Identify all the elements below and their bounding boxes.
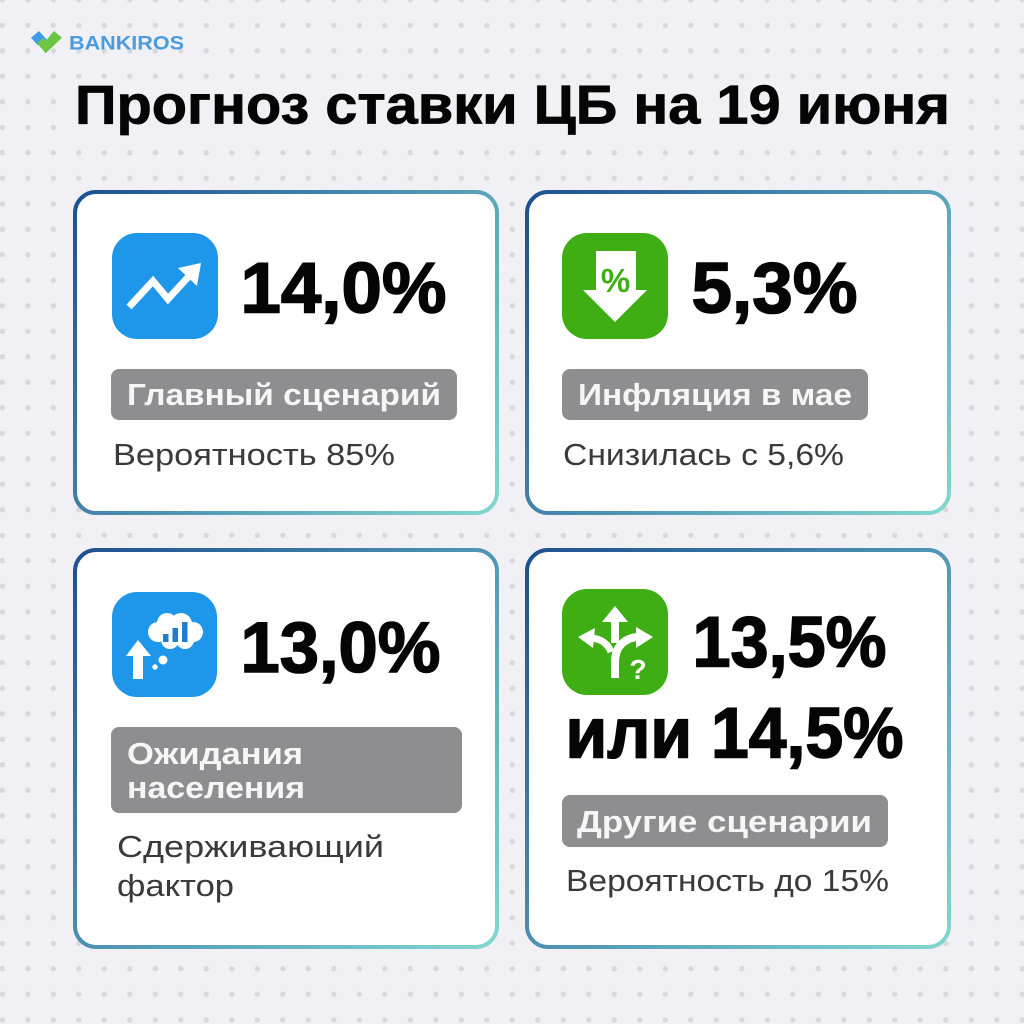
panel: main scenario <box>75 192 497 513</box>
label: household expectations: Ожидания <box>127 736 303 771</box>
label: other scenarios <box>562 795 888 847</box>
text: restraining factor <box>117 829 384 903</box>
icon: rising trend arrow <box>112 233 218 339</box>
panel: other scenarios <box>527 550 949 947</box>
panel: inflation in May <box>527 192 949 513</box>
text: restraining factor: Сдерживающий <box>117 829 384 864</box>
value: or 14,5%: или 14,5% <box>566 694 904 774</box>
label: other scenarios: Другие сценарии <box>577 804 872 839</box>
logo: Bankiros <box>31 31 184 54</box>
value: 14,0%: 14,0% <box>240 248 446 328</box>
icon: branching arrows with question mark: ? <box>629 654 647 685</box>
label: main scenario: Главный сценарий <box>127 377 441 412</box>
value: 13,5%: 13,5% <box>692 602 886 682</box>
icon: logo check mark <box>31 31 62 53</box>
panel: household expectations <box>75 550 497 947</box>
label: main scenario <box>111 369 457 420</box>
icon: branching arrows with question mark <box>562 589 668 695</box>
value: 13,0%: 13,0% <box>240 608 440 688</box>
icon: down arrow with percent <box>562 233 668 339</box>
text: fell from 5,6%: Снизилась с 5,6% <box>563 437 844 472</box>
text: restraining factor: фактор <box>117 868 234 903</box>
title: Прогноз ставки ЦБ на 19 июня <box>75 74 950 136</box>
value: 5,3%: 5,3% <box>692 248 858 328</box>
text: probability up to 15%: Вероятность до 15% <box>566 863 889 898</box>
label: household expectations: населения <box>127 770 305 805</box>
icon: arrow and thought cloud with bars <box>112 592 217 697</box>
label: household expectations <box>111 727 462 813</box>
logo wordmark: BANKIROS <box>69 32 184 54</box>
text: probability 85%: Вероятность 85% <box>113 437 395 472</box>
label: inflation in May: Инфляция в мае <box>578 377 852 412</box>
icon: down arrow with percent: % <box>601 262 630 299</box>
label: inflation in May <box>562 369 868 420</box>
